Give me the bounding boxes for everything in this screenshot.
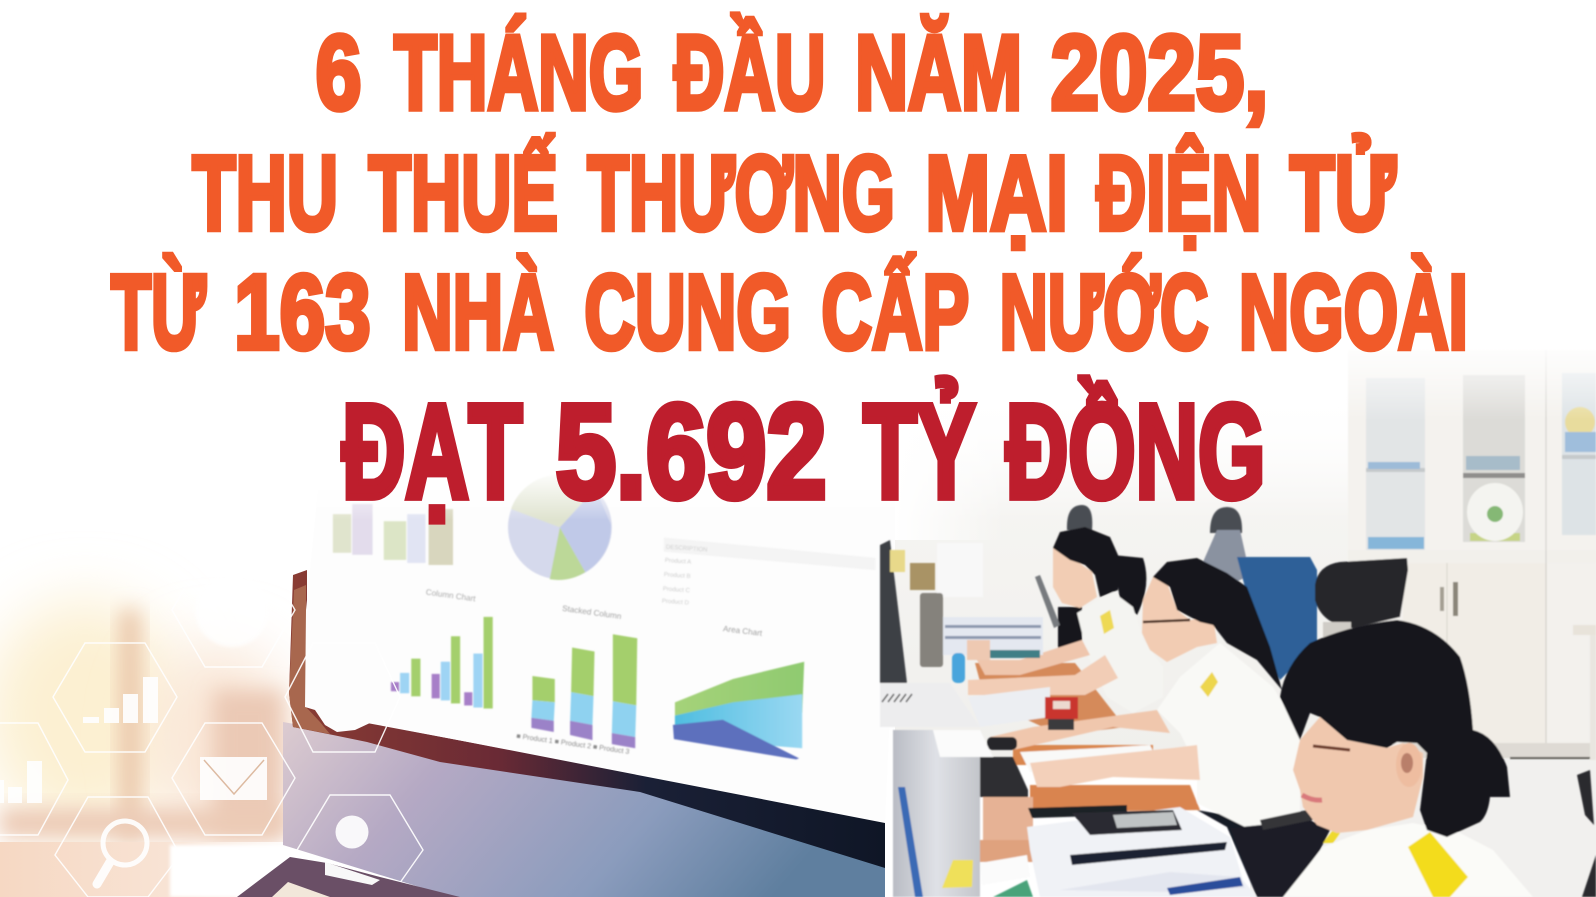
chart: column chart: Column Chart: [425, 588, 477, 604]
office wall: [895, 390, 1596, 760]
icon: person: [336, 816, 368, 848]
title line 1: NĂM: [855, 14, 1022, 132]
title line 1: [316, 14, 1268, 132]
table: Product B: [664, 571, 691, 580]
chair: black: [1315, 558, 1408, 642]
title line 1: ĐẦU: [674, 14, 826, 132]
table: DESCRIPTION: [666, 544, 708, 554]
keyboard and mouse: [973, 737, 1028, 797]
dashboard charts: [333, 475, 875, 759]
table: [662, 538, 875, 607]
title line 1: 2025,: [1051, 14, 1268, 132]
woman 1: [968, 527, 1163, 713]
chart: pie: [508, 475, 612, 580]
chart: stacked column: [516, 604, 637, 756]
window: [937, 543, 983, 597]
monitor bezel: [289, 570, 885, 868]
title line 3: CẤP: [822, 252, 969, 371]
monitor brown edge: [289, 585, 330, 734]
cabinets: [1340, 340, 1596, 759]
woman 2: [990, 558, 1300, 897]
highlighted amount: 5.692: [556, 377, 827, 526]
woman 3: [1230, 620, 1533, 897]
highlighted amount: TỶ: [863, 377, 975, 526]
title line 2: THƯƠNG: [587, 134, 895, 252]
chart: area: [673, 624, 804, 759]
title line 2: MẠI: [925, 134, 1068, 252]
hexagon icons overlay: [0, 553, 423, 897]
right edge furniture: [1573, 625, 1596, 897]
left fade of office wall: [895, 390, 1005, 540]
chart: stacked column: Stacked Column: [562, 604, 622, 621]
title line 3: 163: [234, 253, 371, 371]
title line 2: [192, 134, 1396, 252]
chart: column chart: [391, 588, 493, 709]
highlighted amount: ĐỒNG: [1006, 377, 1265, 526]
paperwork and stamp: [943, 617, 1257, 897]
desks: [975, 663, 1200, 862]
title line 1: THÁNG: [394, 14, 643, 132]
title line 2: ĐIỆN: [1096, 134, 1261, 252]
title line 3: NHÀ: [402, 253, 554, 371]
table: Product C: [663, 585, 691, 594]
highlighted amount: ĐẠT: [342, 377, 522, 526]
office floor: [1250, 758, 1596, 897]
blurred warm backdrop: [0, 600, 460, 897]
title: [111, 14, 1468, 526]
foreground equipment: [880, 540, 1033, 897]
fade over screen top: [290, 470, 910, 520]
table: Product A: [665, 557, 692, 566]
title line 2: THU: [192, 134, 338, 252]
icon: small bars: [0, 761, 42, 803]
chair headrests: [1067, 505, 1250, 585]
chart: top bars: [333, 504, 453, 565]
title line 2: THUẾ: [369, 134, 558, 252]
icon: globe: [195, 573, 269, 647]
icon: rising bars: [83, 677, 158, 723]
icon: magnifier: [97, 821, 147, 884]
table: Product D: [662, 598, 690, 607]
title line 2: TỬ: [1290, 134, 1396, 252]
title line 3: NGOÀI: [1239, 253, 1468, 371]
tablet on desk: [237, 857, 460, 897]
chart: area: Area Chart: [723, 624, 763, 638]
title line 3: [111, 252, 1468, 371]
title line 3: TỪ: [111, 253, 206, 371]
title line 1: 6: [316, 14, 361, 132]
office scene: [880, 340, 1596, 897]
title line 3: CUNG: [584, 253, 791, 371]
chart: stacked column: ■ Product 1 ■ Product 2 ■ Product 3: [516, 732, 630, 756]
chair: blue mesh: [1237, 557, 1317, 680]
highlighted amount: [342, 377, 1265, 526]
icon: envelope: [200, 757, 267, 800]
monitor stand and desk: [283, 722, 885, 897]
monitor screen: [305, 490, 900, 823]
title line 3: NƯỚC: [1000, 253, 1208, 371]
